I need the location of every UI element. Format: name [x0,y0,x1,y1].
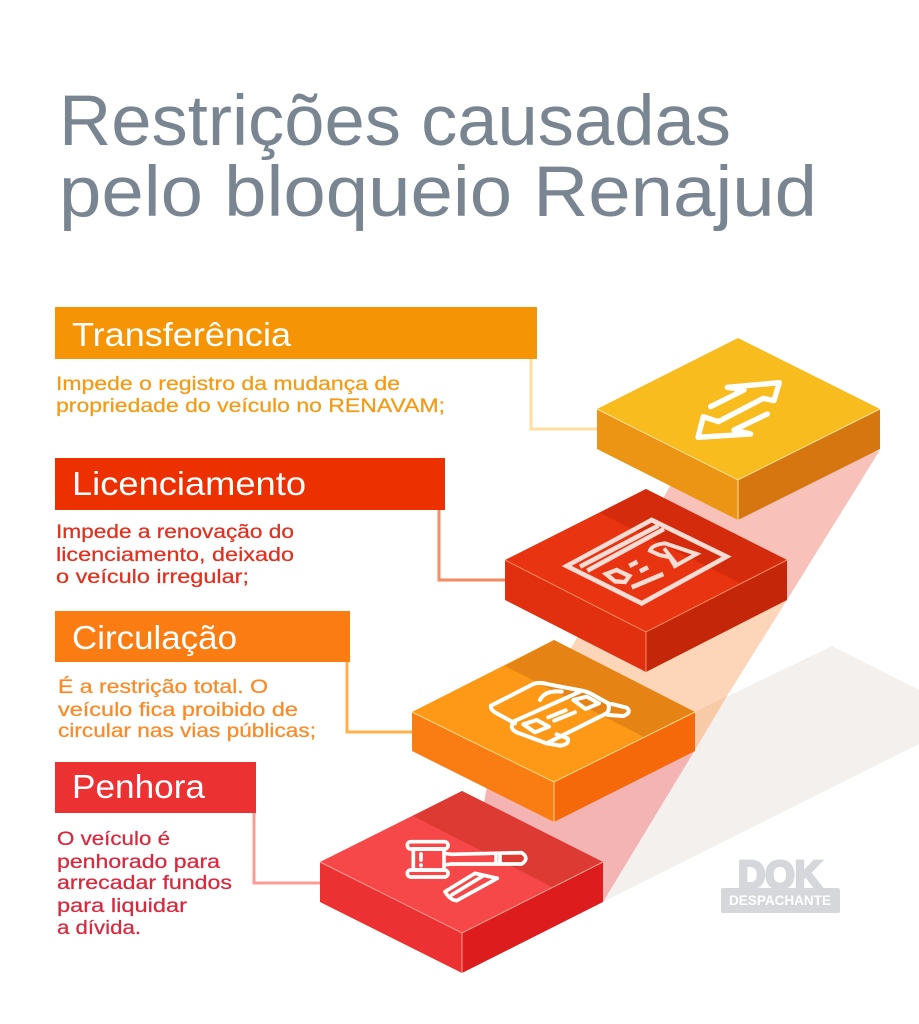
description: propriedade do veículo no RENAVAM; [56,395,445,417]
description: O veículo é [57,828,170,850]
panel: Circulação [55,611,695,822]
icon: gavel [407,842,526,901]
connector line [254,813,322,883]
description: circular nas vias públicas; [58,720,316,742]
icon: transfer arrows [698,383,779,437]
description: licenciamento, deixado [56,544,294,566]
block [412,640,695,822]
description: arrecadar fundos [57,872,232,894]
banner: Penhora [72,768,206,805]
panel: Licenciamento [55,458,787,672]
title [59,82,817,232]
title: pelo bloqueio Renajud [59,153,817,232]
icon: vehicle document [567,520,727,603]
description [56,521,294,588]
block shadow beam: orange to crimson [470,750,695,902]
connector line [347,662,414,732]
description [57,828,232,939]
block [597,338,880,520]
description: É a restrição total. O [58,675,268,698]
logo: DOK Despachante: DESPACHANTE [729,892,831,908]
banner: Licenciamento [72,465,306,502]
banner: Transferência [72,316,292,353]
panel: Penhora [55,762,603,973]
banner [55,307,537,359]
block shadow beam: yellow to red [640,450,880,600]
connector line [531,359,600,429]
logo: DOK Despachante: DOK [738,854,822,897]
banner: Circulação [72,619,237,656]
floor shadow [603,646,919,902]
description: a dívida. [57,917,141,939]
description: o veículo irregular; [56,566,249,588]
panel: Transferência [55,307,880,520]
title: Restrições causadas [59,82,731,161]
description [58,675,316,742]
description: penhorado para [57,851,220,873]
description: Impede o registro da mudança de [56,373,400,395]
icon: car [491,683,629,746]
shadow overlap [695,696,727,750]
description: para liquidar [57,895,188,917]
logo: DOK Despachante [721,854,840,913]
description: veículo fica proibido de [58,699,298,721]
block [505,489,787,672]
block shadow beam: red to orange [540,600,787,750]
banner [55,762,256,813]
connector line [439,510,507,580]
block [320,791,603,973]
description [56,373,445,417]
banner [55,611,350,662]
description: Impede a renovação do [56,521,294,543]
banner [55,458,445,510]
